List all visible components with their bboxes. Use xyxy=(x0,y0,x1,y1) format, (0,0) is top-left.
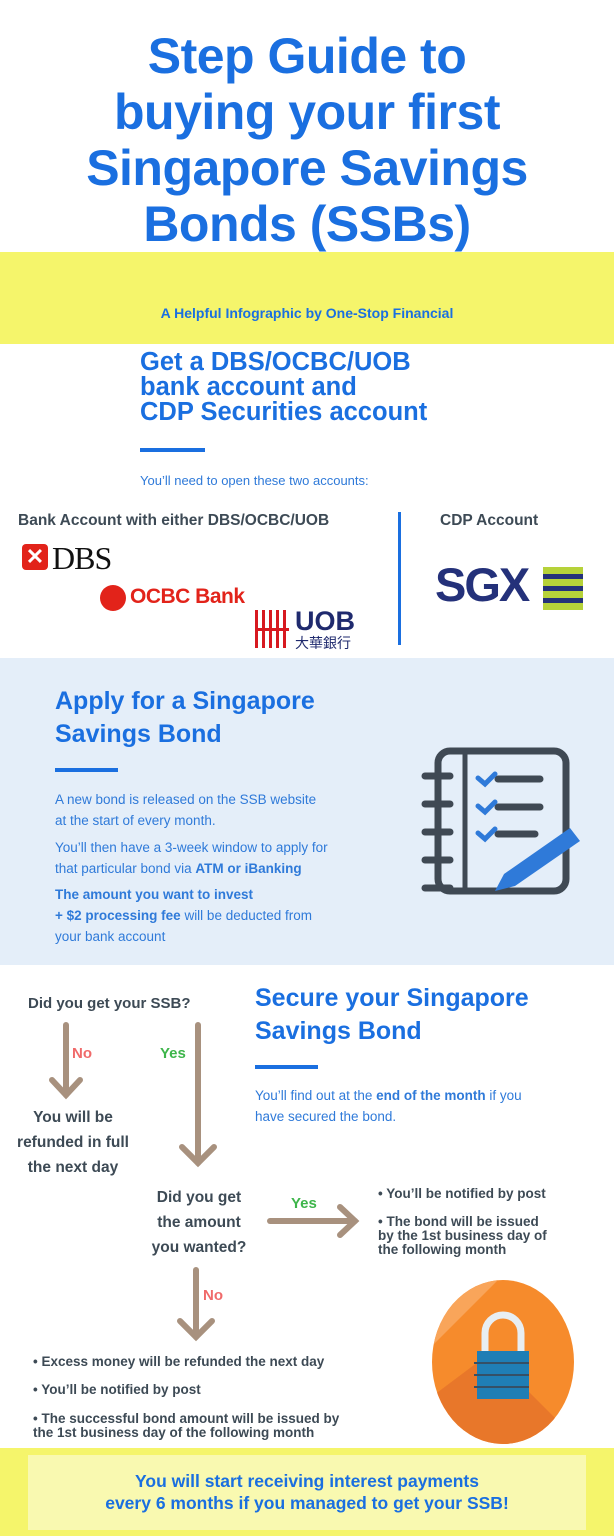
section 1 heading: Get a DBS/OCBC/UOB xyxy=(140,348,411,376)
subtitle band: A Helpful Infographic by One-Stop Financial xyxy=(161,305,453,321)
text apply: A new bond is released on the SSB website xyxy=(55,792,316,807)
flowchart: • The bond will be issued xyxy=(378,1214,539,1229)
flowchart: • You’ll be notified by post xyxy=(378,1186,546,1201)
title: buying your first xyxy=(114,84,500,140)
panel: apply: You’ll then have a 3-week window to apply for xyxy=(55,840,328,855)
logo UOB: UOB xyxy=(295,606,355,636)
footer text: every 6 months if you managed to get your SSB! xyxy=(105,1493,509,1513)
logo DBS xyxy=(22,540,111,576)
heading apply xyxy=(55,687,315,748)
footer text xyxy=(105,1471,509,1513)
logo DBS: ✕ xyxy=(26,544,44,569)
flowchart: by the 1st business day of xyxy=(378,1228,547,1243)
logo UOB xyxy=(255,606,355,651)
flowchart: you wanted? xyxy=(152,1239,246,1256)
section 1 heading: bank account and xyxy=(140,373,357,401)
footer text: You will start receiving interest payments xyxy=(135,1471,479,1491)
flowchart: • The successful bond amount will be issued by xyxy=(33,1411,339,1426)
panel: apply: that particular bond via ATM or iBanking xyxy=(55,861,302,876)
flowchart: refunded in full xyxy=(17,1134,129,1151)
heading apply: Apply for a Singapore xyxy=(55,687,315,715)
flowchart: Did you get xyxy=(157,1189,241,1206)
flowchart: No xyxy=(203,1287,223,1304)
flowchart: the amount xyxy=(157,1214,241,1231)
panel: apply: The amount you want to invest xyxy=(55,887,253,902)
label bank: Bank Account with either DBS/OCBC/UOB xyxy=(18,512,329,529)
flowchart: Did you get your SSB? xyxy=(28,995,191,1012)
flowchart: the next day xyxy=(28,1159,118,1176)
heading apply: Savings Bond xyxy=(55,720,222,748)
logo DBS: DBS xyxy=(52,540,111,576)
flowchart: Yes xyxy=(160,1045,186,1062)
section 1 heading: CDP Securities account xyxy=(140,398,427,426)
logo OCBC xyxy=(100,585,245,611)
flowchart: Yes xyxy=(291,1195,317,1212)
logo SGX: SGX xyxy=(435,558,528,611)
title: Bonds (SSBs) xyxy=(143,196,471,252)
subtitle band xyxy=(0,252,614,344)
title xyxy=(86,28,528,252)
logo OCBC: OCBC Bank xyxy=(130,585,245,608)
flowchart: the 1st business day of the following month xyxy=(33,1425,314,1440)
label CDP: CDP Account xyxy=(440,512,538,529)
flowchart: • Excess money will be refunded the next day xyxy=(33,1354,324,1369)
section 1 heading xyxy=(140,348,427,426)
panel: apply xyxy=(0,658,614,965)
heading secure: Savings Bond xyxy=(255,1017,422,1045)
panel: apply: your bank account xyxy=(55,929,165,944)
panel: apply: + $2 processing fee will be deducted from xyxy=(55,908,312,923)
flowchart: You will be xyxy=(33,1109,113,1126)
section 1 text: You’ll need to open these two accounts: xyxy=(140,473,369,488)
flowchart xyxy=(17,984,574,1444)
text apply xyxy=(55,792,316,828)
flowchart: You’ll find out at the end of the month if you xyxy=(255,1088,522,1103)
flowchart: No xyxy=(72,1045,92,1062)
logo UOB: 大華銀行 xyxy=(295,635,351,651)
flowchart: • You’ll be notified by post xyxy=(33,1382,201,1397)
flowchart: have secured the bond. xyxy=(255,1109,396,1124)
icon: notebook xyxy=(422,748,580,894)
text apply: at the start of every month. xyxy=(55,813,216,828)
logo SGX xyxy=(435,558,583,611)
heading secure xyxy=(255,984,529,1045)
icon: lock xyxy=(432,1280,574,1444)
footer band xyxy=(0,1448,614,1536)
heading secure: Secure your Singapore xyxy=(255,984,529,1012)
title: Singapore Savings xyxy=(86,140,528,196)
flowchart: the following month xyxy=(378,1242,506,1257)
title: Step Guide to xyxy=(148,28,466,84)
